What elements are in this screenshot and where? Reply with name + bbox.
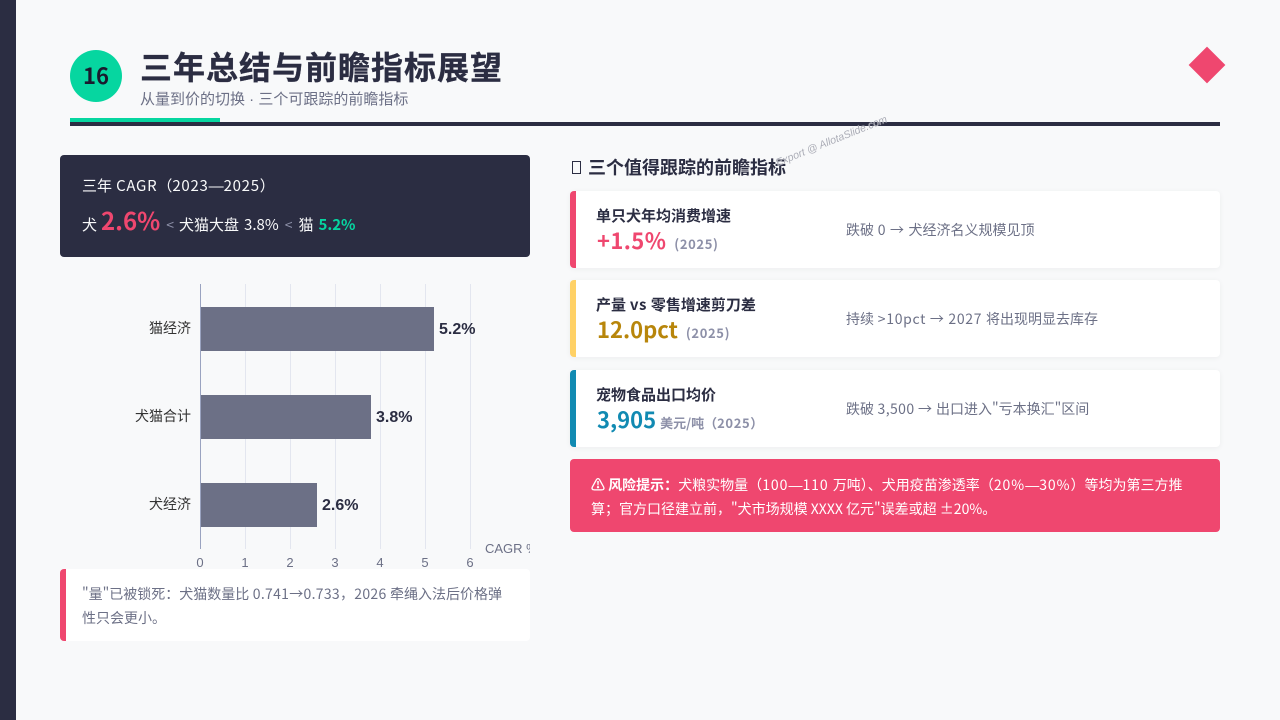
bar chart (135, 284, 538, 570)
callout: volume locked (60, 569, 530, 641)
card title: 单只犬年均消费增速 (596, 205, 731, 226)
panel: CAGR summary (60, 155, 530, 257)
axis tick labels (196, 555, 474, 570)
card value: 3,905 美元/吨（2025） (597, 403, 763, 435)
icon: diamond (1189, 47, 1225, 83)
right heading: 三个值得跟踪的前瞻指标 (588, 154, 786, 180)
axis tick labels: 6 (466, 555, 474, 570)
card note: 持续 >10pct → 2027 将出现明显去库存 (846, 309, 1098, 329)
bar: total: 犬猫合计 (135, 408, 191, 424)
bar: cat economy: 5.2% (439, 321, 475, 338)
section number badge (70, 50, 122, 102)
bar: total (135, 395, 412, 439)
bar: dog economy: 犬经济 (149, 496, 191, 512)
card title: 宠物食品出口均价 (596, 384, 716, 405)
callout text: "量"已被锁死：犬猫数量比 0.741→0.733，2026 牵绳入法后价格弹性只会更小。 (82, 584, 502, 628)
header rule accent (70, 118, 220, 122)
title: 三年总结与前瞻指标展望 (140, 43, 503, 89)
watermark: Export @ AllotaSlide.com (774, 113, 889, 169)
section number badge: 16 (83, 59, 109, 91)
bar: cat economy: 猫经济 (149, 320, 191, 336)
subtitle: 从量到价的切换 · 三个可跟踪的前瞻指标 (140, 88, 408, 109)
card: per-dog spending (570, 191, 1220, 268)
axis tick labels: 5 (421, 555, 429, 570)
card note: 跌破 3,500 → 出口进入"亏本换汇"区间 (846, 399, 1089, 419)
card note: 跌破 0 → 犬经济名义规模见顶 (846, 220, 1035, 240)
header rule (70, 122, 1220, 126)
CAGR comparison: 犬2.6% < 犬猫大盘 3.8% < 猫 5.2% (82, 202, 356, 237)
axis title: CAGR % (485, 541, 538, 556)
icon: missing glyph box (572, 161, 581, 174)
card value: 12.0pct (2025) (597, 313, 730, 345)
card title: 产量 vs 零售增速剪刀差 (596, 294, 756, 315)
bar: dog economy (149, 483, 358, 527)
axis tick labels: 0 (196, 555, 204, 570)
sidebar (0, 0, 16, 720)
axis tick labels: 3 (331, 555, 339, 570)
risk warning (570, 459, 1220, 532)
card value: +1.5% (2025) (597, 224, 719, 256)
card: production vs retail (570, 280, 1220, 357)
bar: dog economy: 2.6% (322, 497, 358, 514)
risk text: ⚠ 风险提示：犬粮实物量（100—110 万吨）、犬用疫苗渗透率（20%—30%）等均为第三方推算；官方口径建立前，"犬市场规模 XXXX 亿元"误差或超 ±20%。 (591, 475, 1183, 519)
axis tick labels: 4 (376, 555, 384, 570)
card: export price (570, 370, 1220, 447)
bar: cat economy (149, 307, 475, 351)
axis tick labels: 2 (286, 555, 294, 570)
axis tick labels: 1 (241, 555, 249, 570)
bar: total: 3.8% (376, 409, 412, 426)
CAGR heading: 三年 CAGR（2023—2025） (82, 175, 275, 196)
